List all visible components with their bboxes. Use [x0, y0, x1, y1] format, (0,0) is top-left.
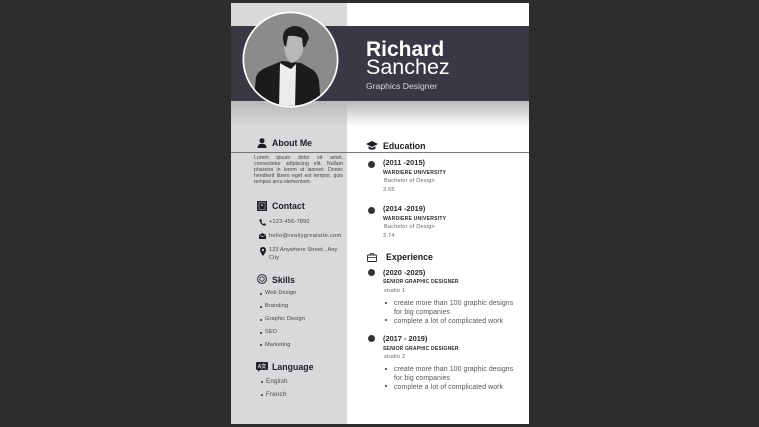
name and job title [366, 38, 450, 90]
street address: 123 Anywhere Street., Any [269, 247, 337, 253]
skills list: Web Design [265, 290, 296, 296]
email address: hello@reallygreatsite.com [269, 233, 341, 239]
education entry 2011-2015: 3.65 [383, 187, 395, 193]
education entry 2011-2015: (2011 -2015) [383, 158, 425, 167]
icon: mail [259, 233, 266, 239]
icon: briefcase [367, 253, 377, 262]
section: contact [257, 200, 341, 261]
skills list [260, 290, 305, 348]
experience entry 2017-2019: studio 2 [384, 354, 405, 360]
heading: language: Language [272, 362, 314, 372]
experience entry 2020-2025: studio 1 [384, 288, 405, 294]
first name: Richard [366, 38, 444, 60]
street address: City [269, 255, 279, 261]
last name: Sanchez [366, 55, 450, 79]
section: language [256, 362, 314, 398]
heading: about me: About Me [272, 138, 312, 148]
icon: skills gear [257, 274, 267, 284]
heading: skills: Skills [272, 274, 295, 284]
heading: experience: Experience [386, 252, 433, 262]
section: education [366, 141, 446, 239]
language list [261, 378, 288, 398]
experience entry 2020-2025 [368, 268, 513, 325]
experience entry 2017-2019: create more than 100 graphic designs [394, 366, 513, 373]
header shadow on sidebar and main column [231, 101, 529, 127]
experience entry 2020-2025: complete a lot of complicated work [394, 318, 503, 325]
experience entry 2017-2019: (2017 - 2019) [383, 334, 427, 342]
experience entry 2020-2025: create more than 100 graphic designs [394, 300, 513, 307]
job title: Graphics Designer [366, 80, 437, 90]
skills list: Marketing [265, 342, 290, 348]
skills list: Graphic Design [265, 316, 305, 322]
experience entry 2020-2025: for big companies [394, 309, 450, 316]
education entry 2011-2015: Bachelor of Design [384, 178, 435, 184]
icon: language bubble: A文 [258, 363, 267, 370]
education entry 2011-2015 [368, 158, 446, 193]
experience entry 2017-2019: complete a lot of complicated work [394, 384, 503, 391]
resume page [231, 3, 529, 424]
section divider line [231, 152, 529, 153]
experience entry 2020-2025: (2020 -2025) [383, 268, 425, 276]
icon: language bubble [256, 362, 268, 372]
skills list: Branding [265, 303, 288, 309]
heading: contact: Contact [272, 200, 305, 210]
sidebar panel [231, 3, 347, 424]
experience entry 2020-2025: SENIOR GRAPHIC DESIGNER [383, 279, 459, 285]
section: about me [254, 138, 343, 184]
education entry 2011-2015: WARDIERE UNIVERSITY [383, 170, 446, 176]
about me paragraph: Lorem ipsum dolor sit amet, consectetur adipiscing elit. Nullam pharetra in lorem at laoreet. Donec hendrerit libero eget est tempor, quis tempus arcu elementum. [254, 154, 343, 184]
education entry 2014-2019: Bachelor of Design [384, 224, 435, 230]
header band [231, 26, 529, 101]
section: skills [257, 274, 305, 348]
icon: phone [259, 219, 266, 226]
street address [269, 247, 338, 261]
portrait photo [242, 12, 338, 108]
education entry 2014-2019 [368, 204, 446, 239]
skills list: SEO [265, 329, 277, 335]
experience entry 2017-2019: SENIOR GRAPHIC DESIGNER [383, 346, 459, 352]
section: experience [367, 252, 513, 391]
language list: French [266, 391, 286, 398]
experience entry 2017-2019 [368, 334, 513, 391]
phone number: +123-456-7890 [269, 219, 310, 225]
icon: location pin [260, 247, 266, 256]
icon: graduation cap [366, 141, 378, 150]
heading: education: Education [383, 141, 426, 151]
experience entry 2017-2019: for big companies [394, 375, 450, 382]
education entry 2014-2019: WARDIERE UNIVERSITY [383, 216, 446, 222]
education entry 2014-2019: (2014 -2019) [383, 204, 425, 213]
education entry 2014-2019: 3.74 [383, 233, 395, 239]
icon: contact book [257, 201, 267, 211]
icon: person [258, 138, 266, 148]
language list: English [266, 378, 288, 385]
